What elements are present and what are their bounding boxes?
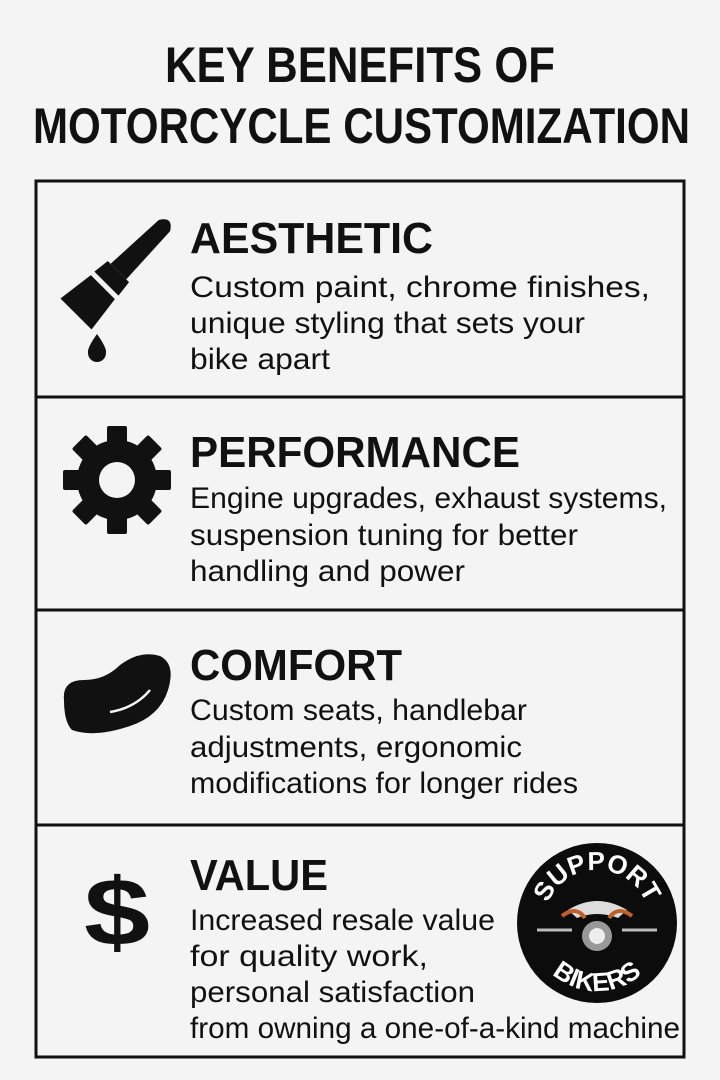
text: performance: handling and power xyxy=(190,555,465,588)
text: comfort xyxy=(190,694,578,800)
text: comfort: modifications for longer rides xyxy=(190,767,578,800)
text: value xyxy=(190,904,680,1045)
text: comfort: Custom seats, handlebar xyxy=(190,694,527,727)
title xyxy=(33,37,690,154)
panel: comfort xyxy=(64,641,578,800)
outer frame xyxy=(36,181,684,1057)
text: performance xyxy=(190,482,667,588)
text: performance: Engine upgrades, exhaust systems, xyxy=(190,482,667,515)
text: performance: suspension tuning for better xyxy=(190,519,578,552)
text: aesthetic: bike apart xyxy=(190,343,331,376)
heading: performance: PERFORMANCE xyxy=(190,428,520,477)
icon: gear xyxy=(63,426,171,534)
text: value: personal satisfaction xyxy=(190,976,475,1009)
text: aesthetic xyxy=(190,271,650,376)
heading: value: VALUE xyxy=(190,851,328,900)
icon: dollar: $ xyxy=(84,859,150,966)
text: comfort: adjustments, ergonomic xyxy=(190,731,522,764)
title: KEY BENEFITS OF xyxy=(165,37,555,93)
text: value: Increased resale value xyxy=(190,904,495,937)
heading: aesthetic: AESTHETIC xyxy=(190,214,433,263)
panel: value xyxy=(84,843,680,1045)
text: value: from owning a one-of-a-kind machine xyxy=(190,1012,680,1045)
icon: seat xyxy=(64,654,171,733)
heading: comfort: COMFORT xyxy=(190,641,402,690)
text: value: for quality work, xyxy=(190,940,428,973)
panel: aesthetic xyxy=(60,205,650,376)
icon: paint brush xyxy=(60,205,185,362)
text: aesthetic: Custom paint, chrome finishes, xyxy=(190,271,650,304)
logo: support bikers: SUPPORT xyxy=(534,852,662,900)
logo: support bikers xyxy=(517,843,677,1003)
text: aesthetic: unique styling that sets your xyxy=(190,307,585,340)
panel: performance xyxy=(63,426,667,588)
logo: support bikers: BIKERS xyxy=(553,960,640,992)
